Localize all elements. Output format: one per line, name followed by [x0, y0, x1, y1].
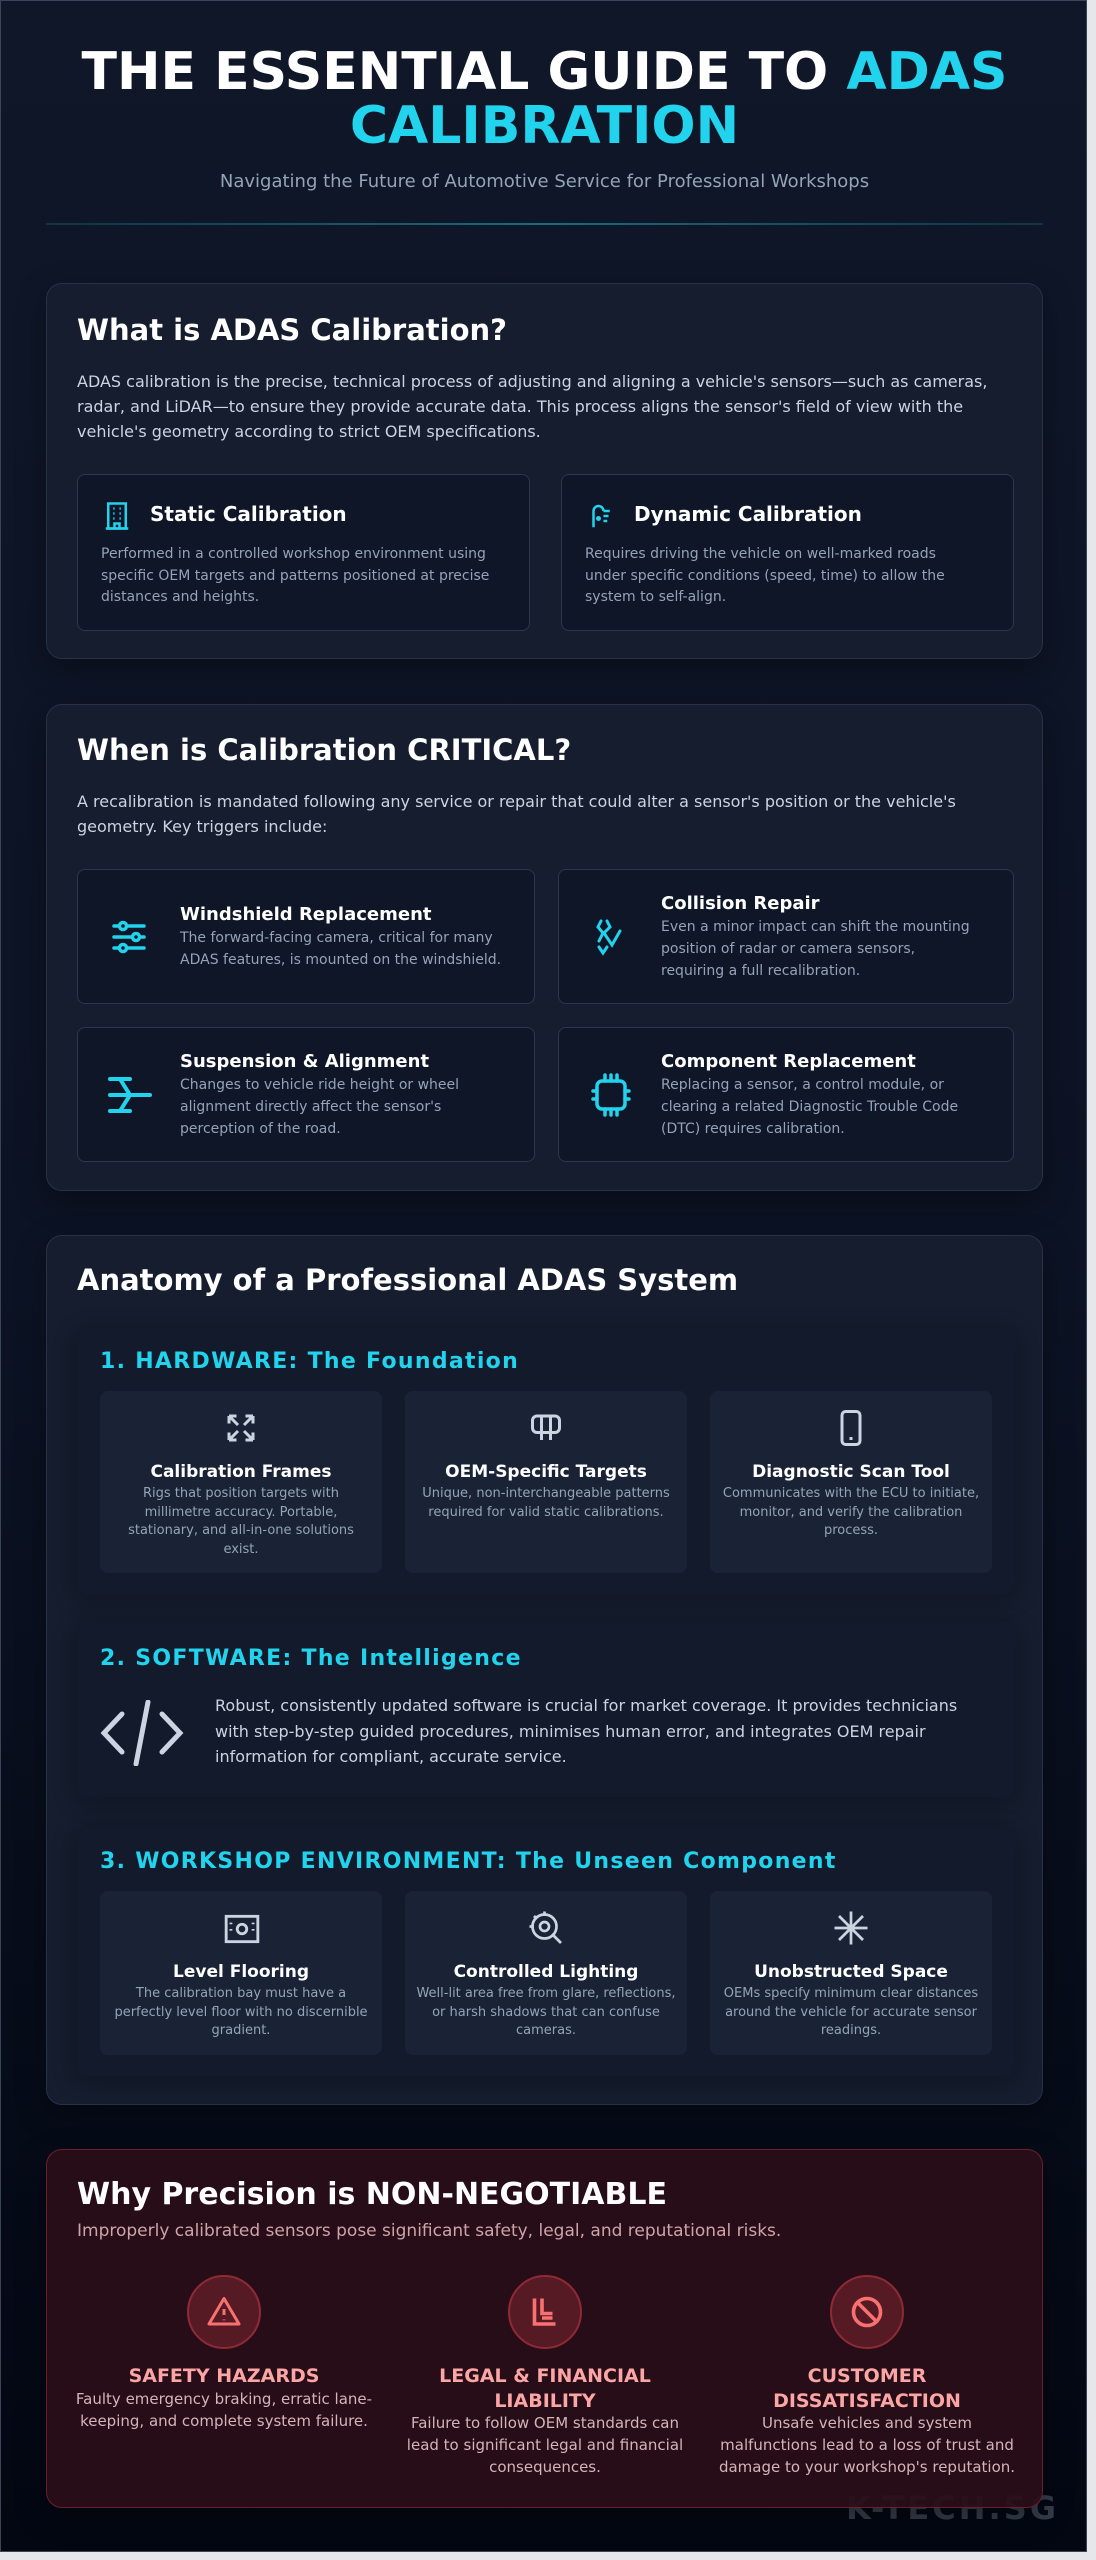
icon: star — [834, 1912, 868, 1944]
card: component — [558, 1027, 1014, 1162]
block: software — [77, 1623, 1015, 1797]
panel: what is ADAS calibration — [46, 283, 1043, 659]
card: suspension — [77, 1027, 535, 1162]
card: oem targets — [405, 1391, 687, 1573]
icon: suspension — [108, 1076, 152, 1114]
card: scan tool: Diagnostic Scan Tool — [752, 1462, 950, 1482]
text: definition: ADAS calibration is the precise, technical process of adjusting and aligning a vehicle's sensors—such as cameras, radar, and LiDAR—to ensure they provide accurate data. This process aligns the sensor's field of view with the vehicle's geometry according to strict OEM specifications. — [77, 372, 987, 441]
card: controlled lighting: Controlled Lighting — [454, 1962, 638, 1982]
title: CALIBRATION — [350, 96, 739, 156]
column: safety hazards — [76, 2275, 372, 2430]
watermark: K-TECH.SG — [846, 2489, 1059, 2527]
heading: hardware: 1. HARDWARE: The Foundation — [100, 1349, 519, 1374]
card: unobstructed space: OEMs specify minimum clear distances around the vehicle for accurate sensor readings. — [724, 1986, 978, 2038]
card: suspension: Suspension & Alignment — [180, 1050, 429, 1072]
card: windshield: The forward-facing camera, critical for many ADAS features, is mounted on the windshield. — [180, 930, 501, 968]
panel: anatomy — [46, 1235, 1043, 2105]
heading: precision: Why Precision is NON-NEGOTIABLE — [77, 2177, 667, 2212]
title: THE ESSENTIAL GUIDE TO ADAS — [82, 42, 1007, 102]
icon: legal — [508, 2275, 582, 2349]
column: safety hazards: SAFETY HAZARDS — [129, 2365, 319, 2387]
card: windshield — [77, 869, 535, 1004]
panel: when is calibration critical — [46, 704, 1043, 1191]
icon: hand/road — [592, 504, 610, 528]
block: workshop — [77, 1829, 1015, 2076]
card: controlled lighting: Well-lit area free from glare, reflections, or harsh shadows that can confuse cameras. — [416, 1986, 676, 2038]
icon: warning — [187, 2275, 261, 2349]
card: collision — [558, 869, 1014, 1004]
subtitle: Navigating the Future of Automotive Service for Professional Workshops — [220, 171, 869, 192]
card: component: Replacing a sensor, a control module, or clearing a related Diagnostic Trouble Code (DTC) requires calibration. — [661, 1076, 958, 1136]
card: unobstructed space — [710, 1891, 992, 2055]
block: hardware — [77, 1329, 1015, 1594]
column: customer dissatisfaction: Unsafe vehicles and system malfunctions lead to a loss of trust and damage to your workshop's reputation. — [719, 2414, 1015, 2476]
card: component: Component Replacement — [661, 1050, 916, 1072]
card: level flooring: Level Flooring — [173, 1962, 309, 1982]
card: unobstructed space: Unobstructed Space — [754, 1962, 948, 1982]
icon: chip — [591, 1073, 631, 1117]
column: legal: LIABILITY — [494, 2390, 596, 2412]
card: static calibration — [77, 474, 530, 631]
card: scan tool: Communicates with the ECU to initiate, monitor, and verify the calibration process. — [723, 1486, 979, 1538]
card: calibration frames: Rigs that position targets with millimetre accuracy. Portable, stationary, and all-in-one solutions exist. — [128, 1486, 354, 1556]
column: legal — [407, 2275, 683, 2476]
text: precision subtitle: Improperly calibrated sensors pose significant safety, legal, and reputational risks. — [77, 2221, 781, 2241]
icon: phone — [840, 1410, 862, 1446]
heading: static: Static Calibration — [150, 502, 347, 526]
card: calibration frames — [100, 1391, 382, 1573]
column: customer dissatisfaction — [719, 2275, 1015, 2476]
column: customer dissatisfaction: CUSTOMER — [808, 2365, 926, 2387]
card: level flooring — [100, 1891, 382, 2055]
card: controlled lighting — [405, 1891, 687, 2055]
card: scan tool — [710, 1391, 992, 1573]
icon: level — [224, 1914, 260, 1944]
icon: sliders — [112, 920, 146, 954]
column: customer dissatisfaction: DISSATISFACTION — [773, 2390, 961, 2412]
icon: building — [106, 502, 128, 530]
title — [82, 42, 1007, 156]
icon: collision — [596, 919, 622, 956]
card: oem targets: OEM-Specific Targets — [445, 1462, 647, 1482]
heading: software: 2. SOFTWARE: The Intelligence — [100, 1646, 522, 1671]
column: legal: Failure to follow OEM standards can lead to significant legal and financial consequences. — [407, 2414, 683, 2476]
heading: anatomy: Anatomy of a Professional ADAS System — [77, 1263, 738, 1297]
heading: what is: What is ADAS Calibration? — [77, 313, 507, 347]
icon: light — [530, 1912, 562, 1944]
card: windshield: Windshield Replacement — [180, 904, 431, 924]
column: safety hazards: Faulty emergency braking, erratic lane-keeping, and complete system failure. — [76, 2390, 372, 2430]
icon: prohibited — [830, 2275, 904, 2349]
icon: expand arrows — [228, 1414, 254, 1442]
heading: critical: When is Calibration CRITICAL? — [77, 733, 571, 767]
card: collision: Even a minor impact can shift the mounting position of radar or camera sensors, requiring a full recalibration. — [661, 918, 970, 978]
card: collision: Collision Repair — [661, 892, 820, 914]
heading: dynamic: Dynamic Calibration — [634, 502, 862, 526]
text: intro: A recalibration is mandated following any service or repair that could alter a sensor's position or the vehicle's geometry. Key triggers include: — [77, 792, 956, 836]
panel: why precision — [46, 2149, 1043, 2508]
card: dynamic calibration — [561, 474, 1014, 631]
icon: code — [100, 1700, 184, 1766]
card: oem targets: Unique, non-interchangeable patterns required for valid static calibrations. — [422, 1486, 670, 1520]
card: calibration frames: Calibration Frames — [150, 1462, 332, 1482]
icon: target board — [531, 1414, 561, 1440]
text: static: Performed in a controlled workshop environment using specific OEM targets and patterns positioned at precise distances and heights. — [101, 546, 489, 605]
heading: workshop: 3. WORKSHOP ENVIRONMENT: The Unseen Component — [100, 1849, 837, 1874]
column: legal: LEGAL & FINANCIAL — [439, 2365, 651, 2387]
text: software: Robust, consistently updated software is crucial for market coverage. It provides technicians with step-by-step guided procedures, minimises human error, and integrates OEM repair information for compliant, accurate service. — [215, 1696, 957, 1766]
text: dynamic: Requires driving the vehicle on well-marked roads under specific conditions (speed, time) to allow the system to self-align. — [585, 546, 945, 605]
card: suspension: Changes to vehicle ride height or wheel alignment directly affect the sensor's perception of the road. — [180, 1076, 459, 1136]
card: level flooring: The calibration bay must have a perfectly level floor with no discernible gradient. — [114, 1986, 368, 2038]
